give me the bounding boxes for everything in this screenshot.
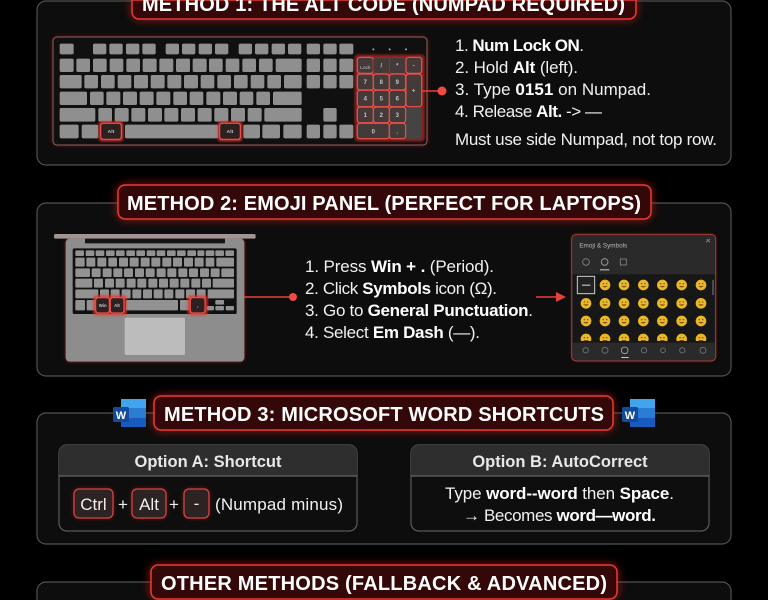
key: minus	[184, 489, 209, 518]
emoji and symbols window	[572, 234, 716, 361]
card: option B: Type word--word then Space.	[445, 484, 674, 503]
highlighted win, alt and period keys	[93, 295, 208, 315]
selected em dash tile	[577, 276, 595, 294]
highlighted numpad: -	[413, 64, 415, 70]
highlighted numpad: 8	[380, 80, 384, 86]
panel: method 2 emoji panel	[37, 185, 731, 376]
steps: method 1: 3. Type 0151 on Numpad.	[455, 80, 651, 99]
steps: method 2	[305, 257, 533, 342]
emoji grid	[581, 280, 706, 344]
steps: method 2: 2. Click Symbols icon (Ω).	[305, 279, 497, 298]
highlighted numpad: Lock	[360, 65, 371, 71]
highlighted numpad: +	[412, 88, 416, 94]
connector: laptop to steps	[244, 293, 297, 301]
key: ctrl: Ctrl	[80, 495, 107, 514]
steps: method 1	[455, 36, 717, 149]
card: option A: (Numpad minus)	[215, 495, 343, 514]
steps: method 1: 1. Num Lock ON.	[455, 36, 584, 55]
highlighted alt keys: Alt	[227, 129, 234, 135]
connector: keyboard to steps	[421, 86, 446, 96]
highlighted numpad: 7	[364, 80, 368, 86]
highlighted numpad: 5	[380, 97, 384, 103]
heading: method 2	[118, 185, 651, 219]
heading: method 2: METHOD 2: EMOJI PANEL (PERFECT FOR LAPTOPS)	[127, 193, 641, 215]
highlighted numpad: 1	[364, 113, 368, 119]
icon: word right	[622, 399, 655, 427]
heading: other methods	[151, 565, 617, 599]
key: minus: -	[194, 494, 199, 513]
highlighted numpad: 2	[380, 113, 384, 119]
laptop illustration	[54, 234, 256, 362]
highlighted numpad: 3	[396, 113, 400, 119]
card: option A: +	[118, 495, 128, 514]
steps: method 1: 4. Release Alt. -> —	[455, 102, 602, 121]
highlighted numpad: 0	[372, 129, 376, 135]
bottom category icons	[583, 347, 706, 354]
highlighted numpad: /	[380, 64, 382, 70]
icon: word left	[113, 399, 146, 427]
highlighted alt keys: Alt	[108, 129, 115, 135]
highlighted win, alt and period keys: Win	[99, 303, 107, 308]
highlighted alt keys	[99, 121, 242, 141]
card: option A: Option A: Shortcut	[135, 453, 282, 471]
highlighted win, alt and period keys: Alt	[114, 303, 120, 308]
highlighted numpad: .	[396, 129, 398, 135]
card: option A: +	[169, 495, 179, 514]
steps: method 2: 1. Press Win + . (Period).	[305, 257, 494, 276]
highlighted numpad: 9	[396, 80, 400, 86]
steps: method 2: 4. Select Em Dash (—).	[305, 323, 480, 342]
highlighted win, alt and period keys: .	[197, 304, 199, 310]
heading: other methods: OTHER METHODS (FALLBACK & ADVANCED)	[161, 573, 607, 595]
highlighted numpad: 6	[396, 97, 400, 103]
key: ctrl	[74, 489, 113, 518]
card: option B	[411, 445, 709, 531]
key: alt	[132, 489, 166, 518]
card: option B: → Becomes word—word.	[463, 506, 656, 525]
keyboard illustration	[53, 37, 427, 145]
steps: method 1: 2. Hold Alt (left).	[455, 58, 578, 77]
panel: method 1 alt code	[37, 0, 731, 165]
panel: other methods	[37, 565, 731, 600]
steps: method 2: 3. Go to General Punctuation.	[305, 301, 533, 320]
key: alt: Alt	[139, 495, 159, 514]
highlighted numpad	[355, 48, 425, 141]
heading: method 3	[154, 396, 613, 430]
icon: word right: W	[625, 410, 636, 422]
emoji and symbols window: Emoji & Symbols	[579, 242, 627, 249]
arrow: steps to emoji panel	[536, 292, 566, 302]
card: option B: Option B: AutoCorrect	[472, 453, 648, 471]
highlighted numpad: *	[396, 64, 399, 70]
card: option A	[59, 445, 357, 531]
heading: method 3: METHOD 3: MICROSOFT WORD SHORTCUTS	[164, 404, 604, 426]
highlighted numpad: 4	[364, 97, 368, 103]
steps: method 1: Must use side Numpad, not top row.	[455, 130, 717, 149]
panel: method 3 word shortcuts	[37, 396, 731, 544]
icon: word left: W	[116, 410, 127, 422]
